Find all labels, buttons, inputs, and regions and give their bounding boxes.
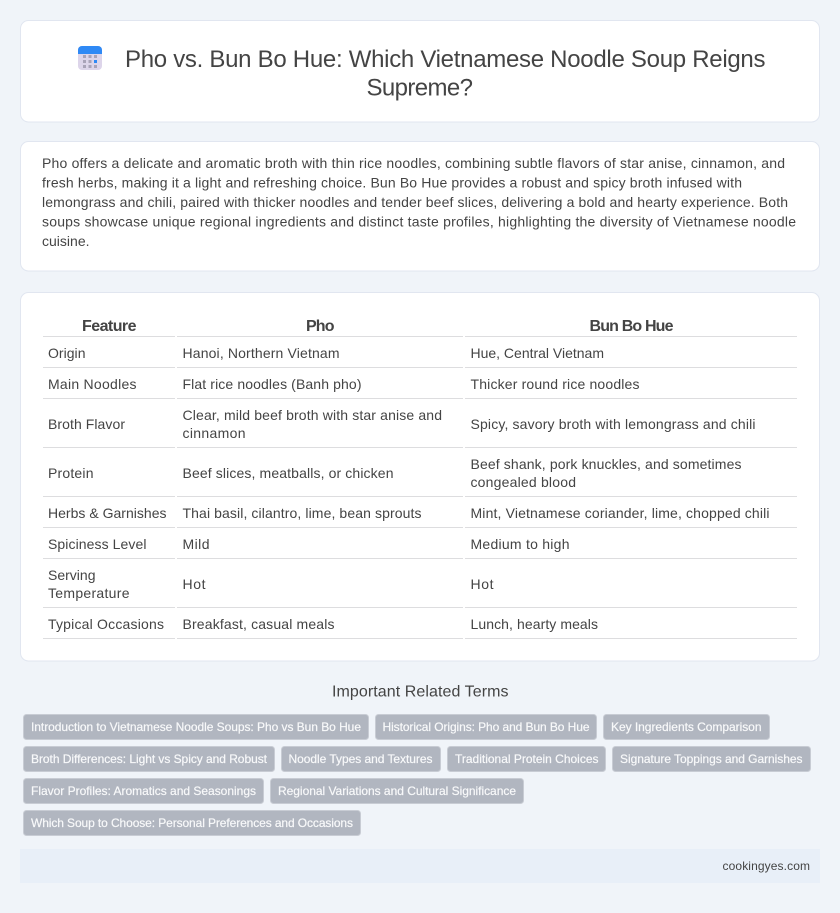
row: origin: Hue, Central Vietnam xyxy=(470,345,604,361)
row: protein xyxy=(43,456,797,497)
tag: noodle types: Noodle Types and Textures xyxy=(288,752,432,766)
footer: cookingyes.com xyxy=(722,859,810,873)
row: spiciness level: Medium to high xyxy=(470,536,570,552)
row: spiciness level: Spiciness Level xyxy=(48,536,146,552)
tag: noodle types xyxy=(282,746,440,772)
tag: broth differences: Broth Differences: Light vs Spicy and Robust xyxy=(31,752,268,766)
heading: important related terms: Important Related Terms xyxy=(332,684,508,700)
panel: intro text: soups showcase unique regional ingredients and distinct taste profiles, highlighting the diversity of Vietnamese noodle xyxy=(42,214,796,230)
panel: title header xyxy=(20,20,820,122)
row: origin: Origin xyxy=(48,345,86,361)
row: main noodles: Flat rice noodles (Banh pho) xyxy=(182,376,362,392)
row: broth flavor: Broth Flavor xyxy=(48,416,125,432)
row: typical occasions: Typical Occasions xyxy=(48,616,164,632)
panel: intro text: cuisine. xyxy=(42,233,90,249)
panel: intro text: Pho offers a delicate and aromatic broth with thin rice noodles, combining subtle flavors of star anise, cinnamon, and xyxy=(42,155,785,171)
tag: key ingredients: Key Ingredients Comparison xyxy=(611,720,762,734)
row: typical occasions xyxy=(43,616,797,639)
footer xyxy=(20,849,820,883)
row: serving temperature: Serving xyxy=(48,567,96,583)
row: broth flavor: Clear, mild beef broth with star anise and xyxy=(182,407,442,423)
row: protein: Beef shank, pork knuckles, and sometimes xyxy=(470,456,742,472)
table header row: Feature xyxy=(82,318,137,335)
tag: historical origins: Historical Origins: Pho and Bun Bo Hue xyxy=(382,720,590,734)
title xyxy=(125,46,766,102)
table header row: Pho xyxy=(306,318,335,335)
row: broth flavor: Spicy, savory broth with lemongrass and chili xyxy=(470,416,756,432)
row: herbs and garnishes: Herbs & Garnishes xyxy=(48,505,166,521)
row: broth flavor xyxy=(43,407,797,448)
tag: regional variations xyxy=(270,778,524,804)
tag: historical origins xyxy=(376,714,596,740)
row: main noodles xyxy=(43,376,797,399)
panel: intro text xyxy=(20,142,820,271)
row: protein: Beef slices, meatballs, or chicken xyxy=(182,465,394,481)
row: serving temperature: Hot xyxy=(470,576,494,592)
row: herbs and garnishes xyxy=(43,505,797,528)
row: protein: congealed blood xyxy=(470,474,576,490)
tag: protein choices xyxy=(448,746,606,772)
row: main noodles: Main Noodles xyxy=(48,376,136,392)
row: origin xyxy=(43,345,797,368)
panel: comparison table xyxy=(20,292,820,661)
row: herbs and garnishes: Thai basil, cilantro, lime, bean sprouts xyxy=(182,505,422,521)
row: serving temperature: Temperature xyxy=(48,585,130,601)
tag: toppings and garnishes: Signature Toppings and Garnishes xyxy=(620,752,802,766)
tag: introduction: Introduction to Vietnamese Noodle Soups: Pho vs Bun Bo Hue xyxy=(31,720,361,734)
tag: regional variations: Regional Variations and Cultural Significance xyxy=(278,784,516,798)
row: main noodles: Thicker round rice noodles xyxy=(470,376,640,392)
title: Pho vs. Bun Bo Hue: Which Vietnamese Noodle Soup Reigns xyxy=(125,46,766,73)
row: typical occasions: Breakfast, casual meals xyxy=(182,616,334,632)
tag: flavor profiles xyxy=(24,778,264,804)
panel: related term tags xyxy=(24,714,810,836)
table header row xyxy=(43,318,797,337)
row: serving temperature xyxy=(43,567,797,608)
tag: key ingredients xyxy=(604,714,770,740)
tag: which soup to choose xyxy=(24,810,360,836)
row: serving temperature: Hot xyxy=(182,576,206,592)
row: herbs and garnishes: Mint, Vietnamese coriander, lime, chopped chili xyxy=(470,505,770,521)
row: spiciness level: Mild xyxy=(182,536,210,552)
tag: which soup to choose: Which Soup to Choose: Personal Preferences and Occasions xyxy=(31,816,353,830)
tag: flavor profiles: Flavor Profiles: Aromatics and Seasonings xyxy=(31,784,256,798)
panel: intro text: lemongrass and chili, paired with thicker noodles and tender beef slices, delivering a bold and hearty experience. Both xyxy=(42,194,788,210)
row: typical occasions: Lunch, hearty meals xyxy=(470,616,598,632)
tag: introduction xyxy=(24,714,368,740)
tag: protein choices: Traditional Protein Choices xyxy=(455,752,598,766)
title: Supreme? xyxy=(366,74,473,102)
icon: calendar xyxy=(78,46,102,70)
row: spiciness level xyxy=(43,536,797,559)
tag: broth differences xyxy=(24,746,274,772)
row: origin: Hanoi, Northern Vietnam xyxy=(182,345,340,361)
row: broth flavor: cinnamon xyxy=(182,425,246,441)
table header row: Bun Bo Hue xyxy=(590,318,674,335)
tag: toppings and garnishes xyxy=(612,746,810,772)
row: protein: Protein xyxy=(48,465,94,481)
panel: intro text: fresh herbs, making it a light and refreshing choice. Bun Bo Hue provides a robust and spicy broth infused with xyxy=(42,174,742,190)
